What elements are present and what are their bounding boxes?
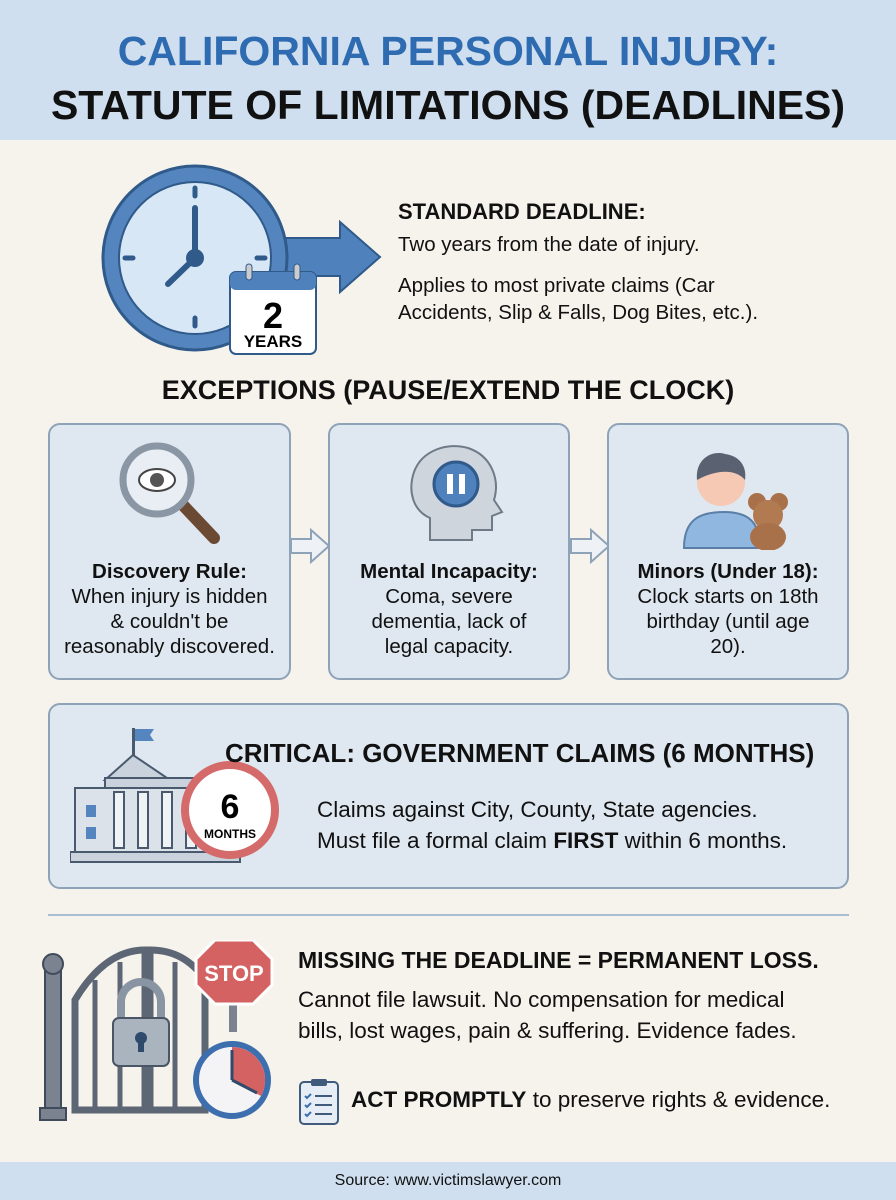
panel: minors: birthday (until age [647, 610, 809, 633]
panel: minors: Clock starts on 18th [637, 585, 819, 608]
panel: mental incapacity: Coma, severe [385, 585, 513, 608]
heading: missing the deadline: MISSING THE DEADLINE = PERMANENT LOSS. [298, 947, 819, 973]
icon: clipboard [299, 1079, 339, 1125]
standard deadline text [398, 199, 758, 324]
text: government claims: Claims against City, County, State agencies. [317, 797, 758, 822]
title: CALIFORNIA PERSONAL INJURY: [118, 28, 778, 74]
text: consequences: bills, lost wages, pain & suffering. Evidence fades. [298, 1018, 797, 1043]
heading: exceptions: EXCEPTIONS (PAUSE/EXTEND THE CLOCK) [162, 375, 734, 405]
text: government claims [317, 797, 787, 853]
panel: government claims [48, 703, 849, 889]
panel: discovery rule: When injury is hidden [72, 585, 268, 608]
icon: child with teddy [683, 453, 788, 550]
icon: locked gate, stop sign, stopwatch [39, 940, 274, 1121]
panel: discovery rule: & couldn't be [111, 610, 228, 633]
header band [0, 0, 896, 140]
icon: courthouse with 6 months clock: 6 [221, 788, 239, 826]
icon: magnifier [120, 442, 220, 544]
arrow [291, 528, 328, 564]
icon: locked gate, stop sign, stopwatch: STOP [204, 961, 264, 986]
panel: minors [607, 423, 849, 680]
panel: discovery rule: reasonably discovered. [64, 635, 275, 658]
standard deadline text: Accidents, Slip & Falls, Dog Bites, etc.). [398, 301, 758, 324]
heading: critical: CRITICAL: GOVERNMENT CLAIMS (6 MONTHS) [225, 738, 814, 768]
panel: mental incapacity: legal capacity. [385, 635, 513, 658]
standard deadline text: Two years from the date of injury. [398, 233, 700, 256]
panel: mental incapacity [328, 423, 570, 680]
icon: courthouse with 6 months clock: MONTHS [204, 827, 256, 841]
standard deadline text: Applies to most private claims (Car [398, 274, 715, 297]
panel: discovery rule: Discovery Rule: [92, 560, 247, 583]
icon: clock with calendar [102, 164, 382, 355]
text: consequences [298, 987, 797, 1043]
panel: mental incapacity: dementia, lack of [372, 610, 526, 633]
panel: minors: 20). [710, 635, 746, 658]
title: STATUTE OF LIMITATIONS (DEADLINES) [51, 82, 845, 128]
arrow [570, 528, 607, 564]
text: consequences: Cannot file lawsuit. No compensation for medical [298, 987, 784, 1012]
icon: courthouse with 6 months clock [70, 728, 279, 863]
icon: head with pause [410, 445, 504, 541]
panel: minors: Minors (Under 18): [637, 560, 819, 583]
panel: discovery rule [48, 423, 291, 680]
standard deadline text: STANDARD DEADLINE: [398, 199, 646, 224]
icon: clock with calendar: 2 [263, 295, 283, 336]
footer: source [0, 1162, 896, 1200]
title [51, 28, 845, 128]
panel: mental incapacity: Mental Incapacity: [360, 560, 538, 583]
text: act promptly: ACT PROMPTLY to preserve rights & evidence. [351, 1087, 830, 1112]
icon: clock with calendar: YEARS [244, 332, 302, 351]
text: government claims: Must file a formal claim FIRST within 6 months. [317, 828, 787, 853]
footer: source: Source: www.victimslawyer.com [335, 1172, 561, 1189]
